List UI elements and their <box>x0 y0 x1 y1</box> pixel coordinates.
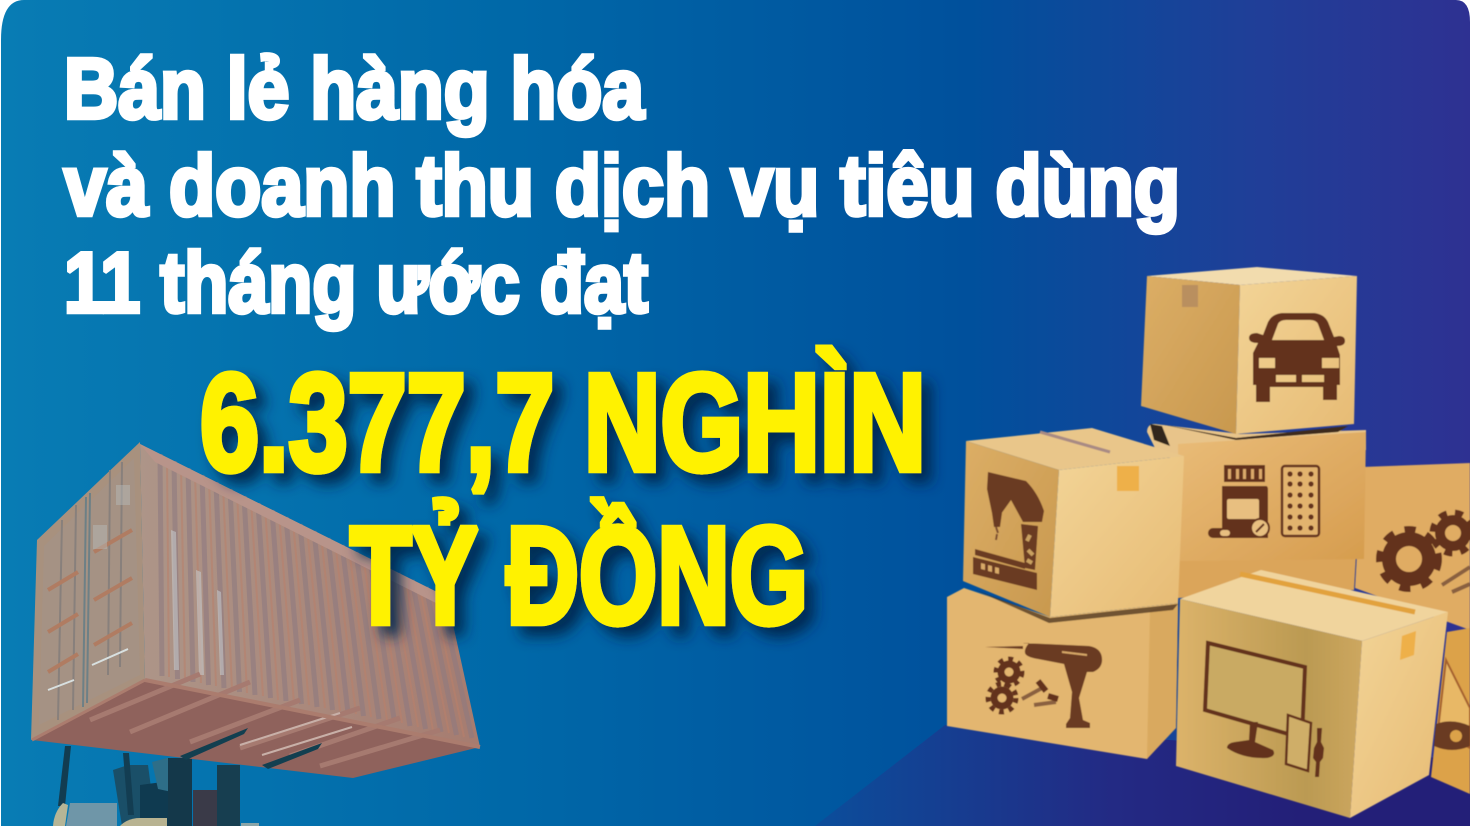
icon: bottles <box>1434 660 1470 750</box>
icon: car <box>1249 313 1345 402</box>
icon: gears <box>1380 513 1470 588</box>
box: bottles <box>1431 628 1470 794</box>
title <box>64 42 1180 331</box>
title line 2: và doanh thu dịch vụ tiêu dùng <box>64 139 1180 234</box>
forklift <box>53 746 259 826</box>
container side wall <box>140 444 480 747</box>
floor shape behind boxes <box>815 725 1470 826</box>
corrugation ribs <box>160 454 472 738</box>
figure line 2: TỶ ĐỒNG <box>350 499 808 653</box>
title line 1: Bán lẻ hàng hóa <box>64 42 645 137</box>
icon: drill and gears <box>985 643 1102 728</box>
cardboard boxes group <box>947 267 1470 818</box>
container door end <box>31 442 145 740</box>
icon: medicine bottle and pills <box>1208 465 1319 538</box>
box: medicine <box>1147 424 1366 561</box>
box: car <box>1141 267 1357 440</box>
title line 3: 11 tháng ước đạt <box>64 236 648 331</box>
box: gears <box>1355 463 1470 630</box>
container underside <box>32 680 480 778</box>
icon: monitor and devices <box>1205 643 1324 777</box>
icon: robot arm <box>973 472 1044 590</box>
box: drill <box>947 588 1178 759</box>
headline figure <box>200 346 926 653</box>
box: robot arm <box>963 428 1184 623</box>
box: monitor <box>1176 570 1448 818</box>
figure line 1: 6.377,7 NGHÌN <box>200 346 926 500</box>
box: lower back <box>1178 555 1356 598</box>
shipping container <box>31 442 480 778</box>
